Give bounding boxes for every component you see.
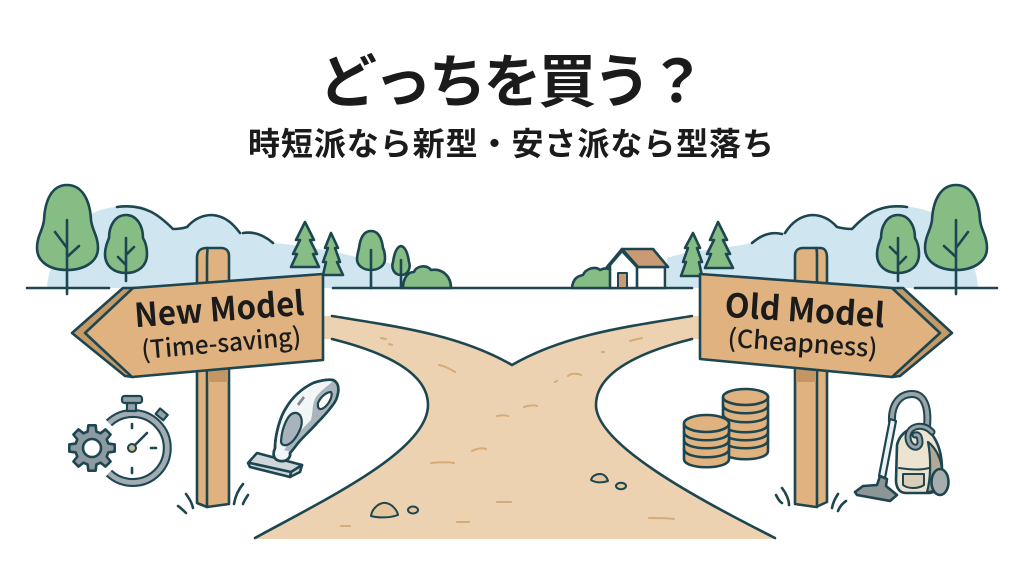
big right tree <box>925 185 987 294</box>
sign label: new model: New Model <box>132 277 306 337</box>
icon: coin stacks <box>684 389 768 467</box>
sign label: cheapness: (Cheapness) <box>727 319 879 365</box>
back coin stack <box>723 389 768 459</box>
icon: stopwatch and gear <box>69 396 168 482</box>
title: どっちを買う？ <box>319 35 706 119</box>
road stones <box>371 474 626 517</box>
left pine trees <box>291 222 343 275</box>
icon: gear <box>69 425 115 471</box>
right pine trees <box>681 222 733 276</box>
big left tree <box>37 185 98 294</box>
left sky and clouds <box>47 206 410 288</box>
right bush <box>572 268 611 288</box>
left signpost <box>197 248 229 507</box>
icon: handheld vacuum <box>248 380 338 477</box>
ground line <box>27 287 997 289</box>
subtitle: 時短派なら新型・安さ派なら型落ち <box>248 119 774 165</box>
small right tree <box>877 215 919 281</box>
icon: canister vacuum <box>855 394 948 501</box>
small left tree <box>105 215 147 281</box>
right sign: Old Model <box>700 274 952 377</box>
sign label: time-saving: (Time-saving) <box>140 317 302 367</box>
midground left trees <box>357 231 410 288</box>
left bush <box>403 266 451 288</box>
right signpost <box>795 248 827 507</box>
front coin stack <box>684 415 729 467</box>
right sky and clouds <box>667 206 978 288</box>
house <box>607 249 668 288</box>
forked dirt road <box>255 316 775 539</box>
left sign: New Model <box>72 274 323 377</box>
grass tufts <box>178 484 846 513</box>
road marks <box>341 338 674 526</box>
sign label: old model: Old Model <box>724 279 886 337</box>
